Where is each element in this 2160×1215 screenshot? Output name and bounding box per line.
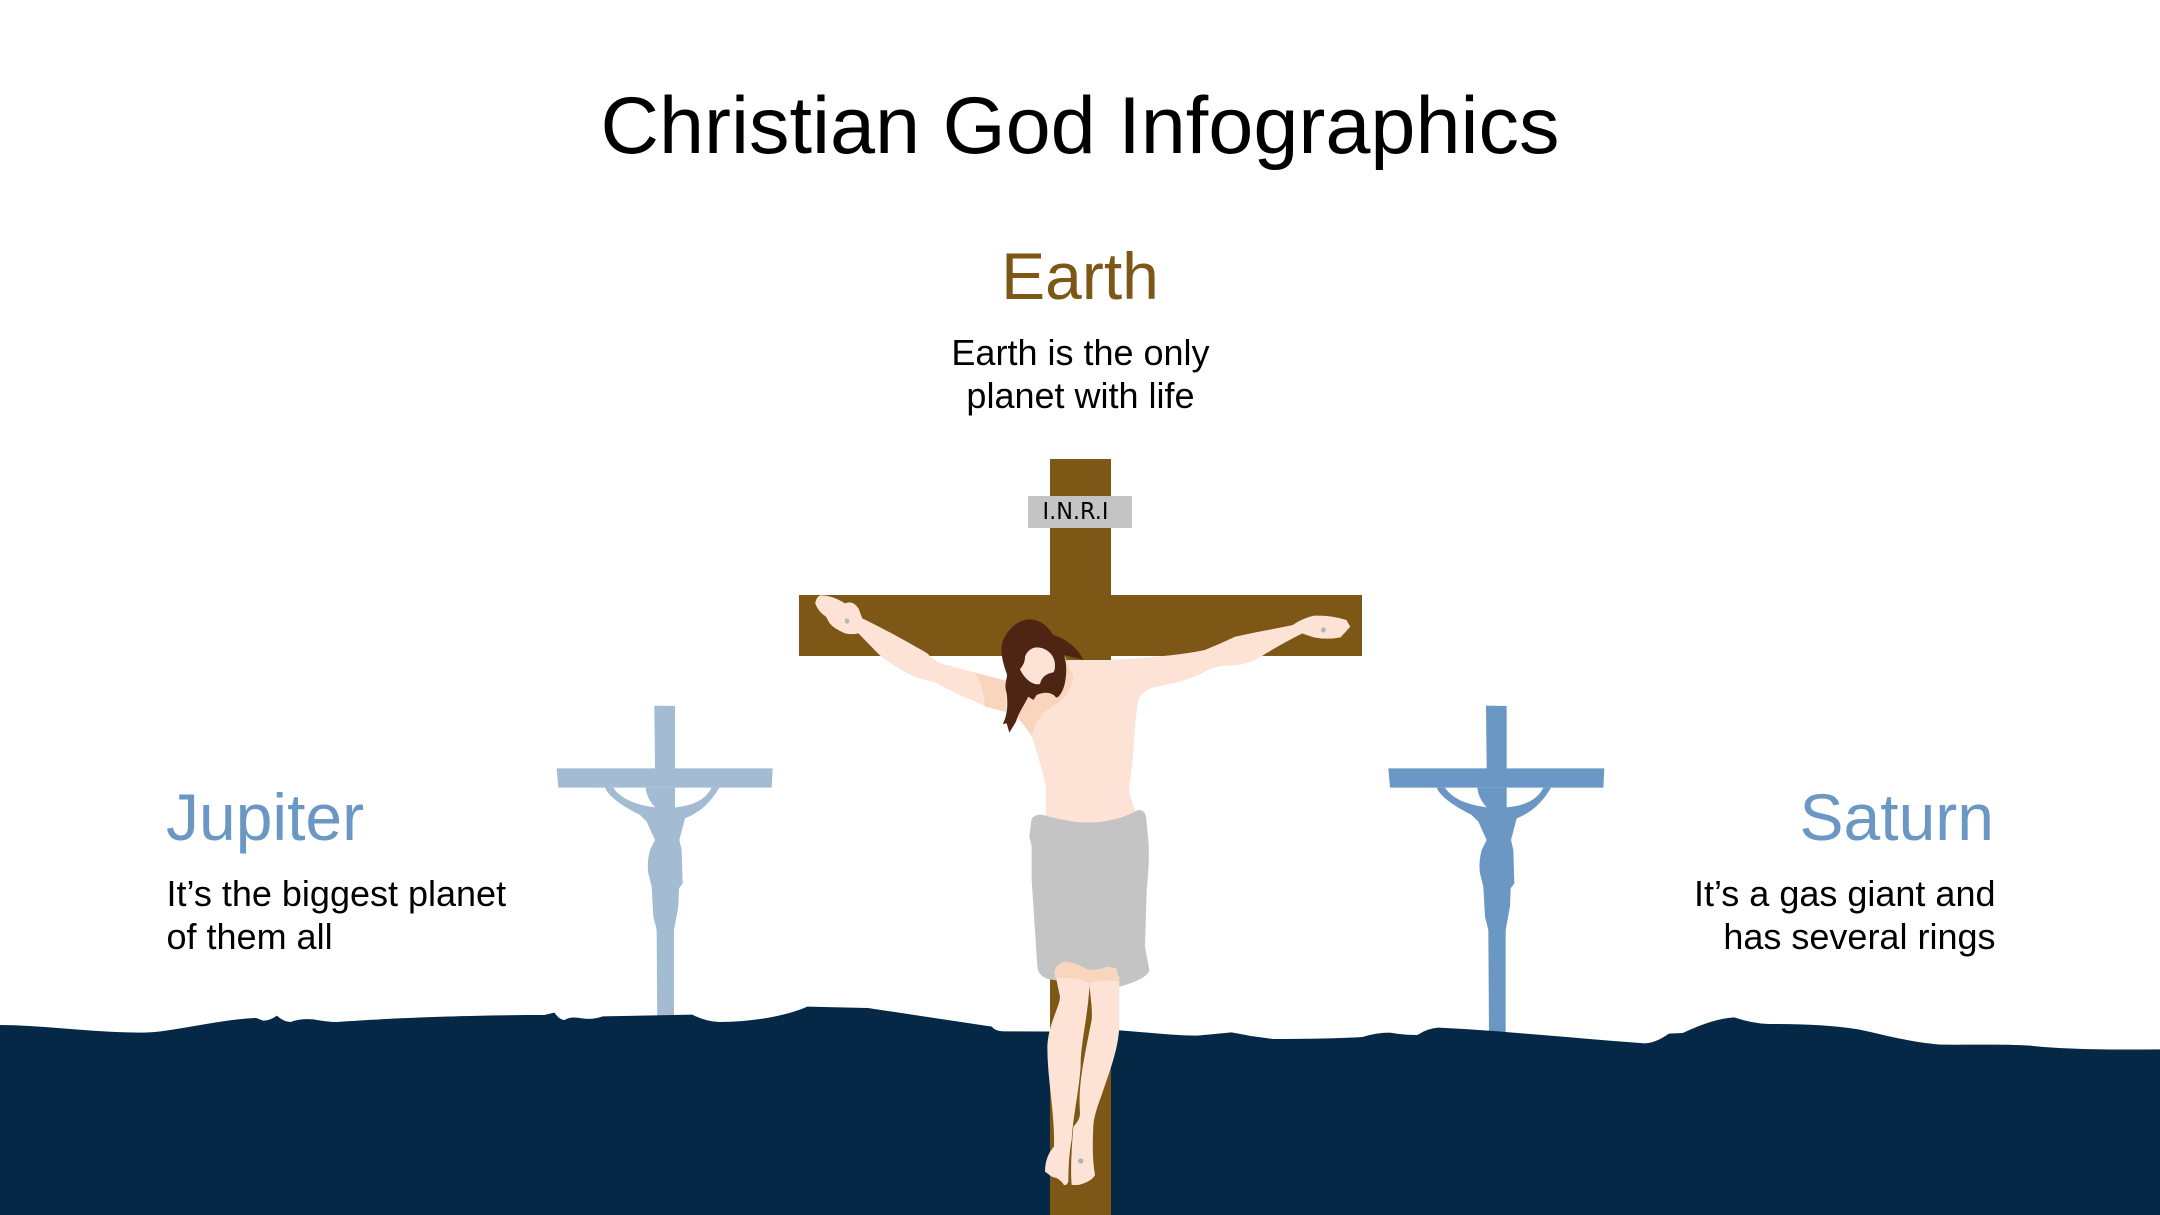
text block: Earth description: Earth is the only	[951, 332, 1210, 373]
text block: Jupiter description: It’s the biggest planet	[166, 873, 506, 914]
figure: face	[1020, 647, 1055, 684]
icon: left hand nail	[845, 618, 849, 624]
title: Christian God Infographics	[600, 81, 1560, 171]
text block: Saturn description: has several rings	[1723, 916, 1996, 957]
text block: Jupiter description: of them all	[166, 916, 333, 957]
figure: neck shading	[1010, 657, 1073, 736]
text block: Earth description: planet with life	[966, 375, 1195, 416]
placard: I.N.R.I	[1028, 496, 1132, 528]
figure: head	[1001, 619, 1083, 736]
central cross	[799, 459, 1362, 1215]
heading: Earth: Earth	[1001, 239, 1159, 313]
icon: foot nail	[1078, 1158, 1083, 1164]
ground silhouette	[0, 1007, 2160, 1215]
figure: thigh shading	[1054, 962, 1119, 983]
figure: right leg	[1071, 977, 1119, 1185]
figure: torso and arms	[815, 595, 1350, 840]
icon: right hand nail	[1321, 627, 1326, 633]
placard: I.N.R.I: I.N.R.I	[1042, 499, 1108, 525]
text block: Saturn description: It’s a gas giant and	[1694, 873, 1996, 914]
icon: left crucifix silhouette	[557, 706, 773, 1037]
figure: hair and beard	[1001, 619, 1083, 733]
heading: Saturn: Saturn	[1800, 780, 1994, 854]
heading: Jupiter: Jupiter	[166, 780, 364, 854]
figure: left leg	[1045, 970, 1089, 1185]
figure: arm shading	[975, 673, 1006, 712]
figure: loincloth and legs	[1029, 810, 1149, 1185]
icon: right crucifix silhouette	[1388, 706, 1604, 1037]
